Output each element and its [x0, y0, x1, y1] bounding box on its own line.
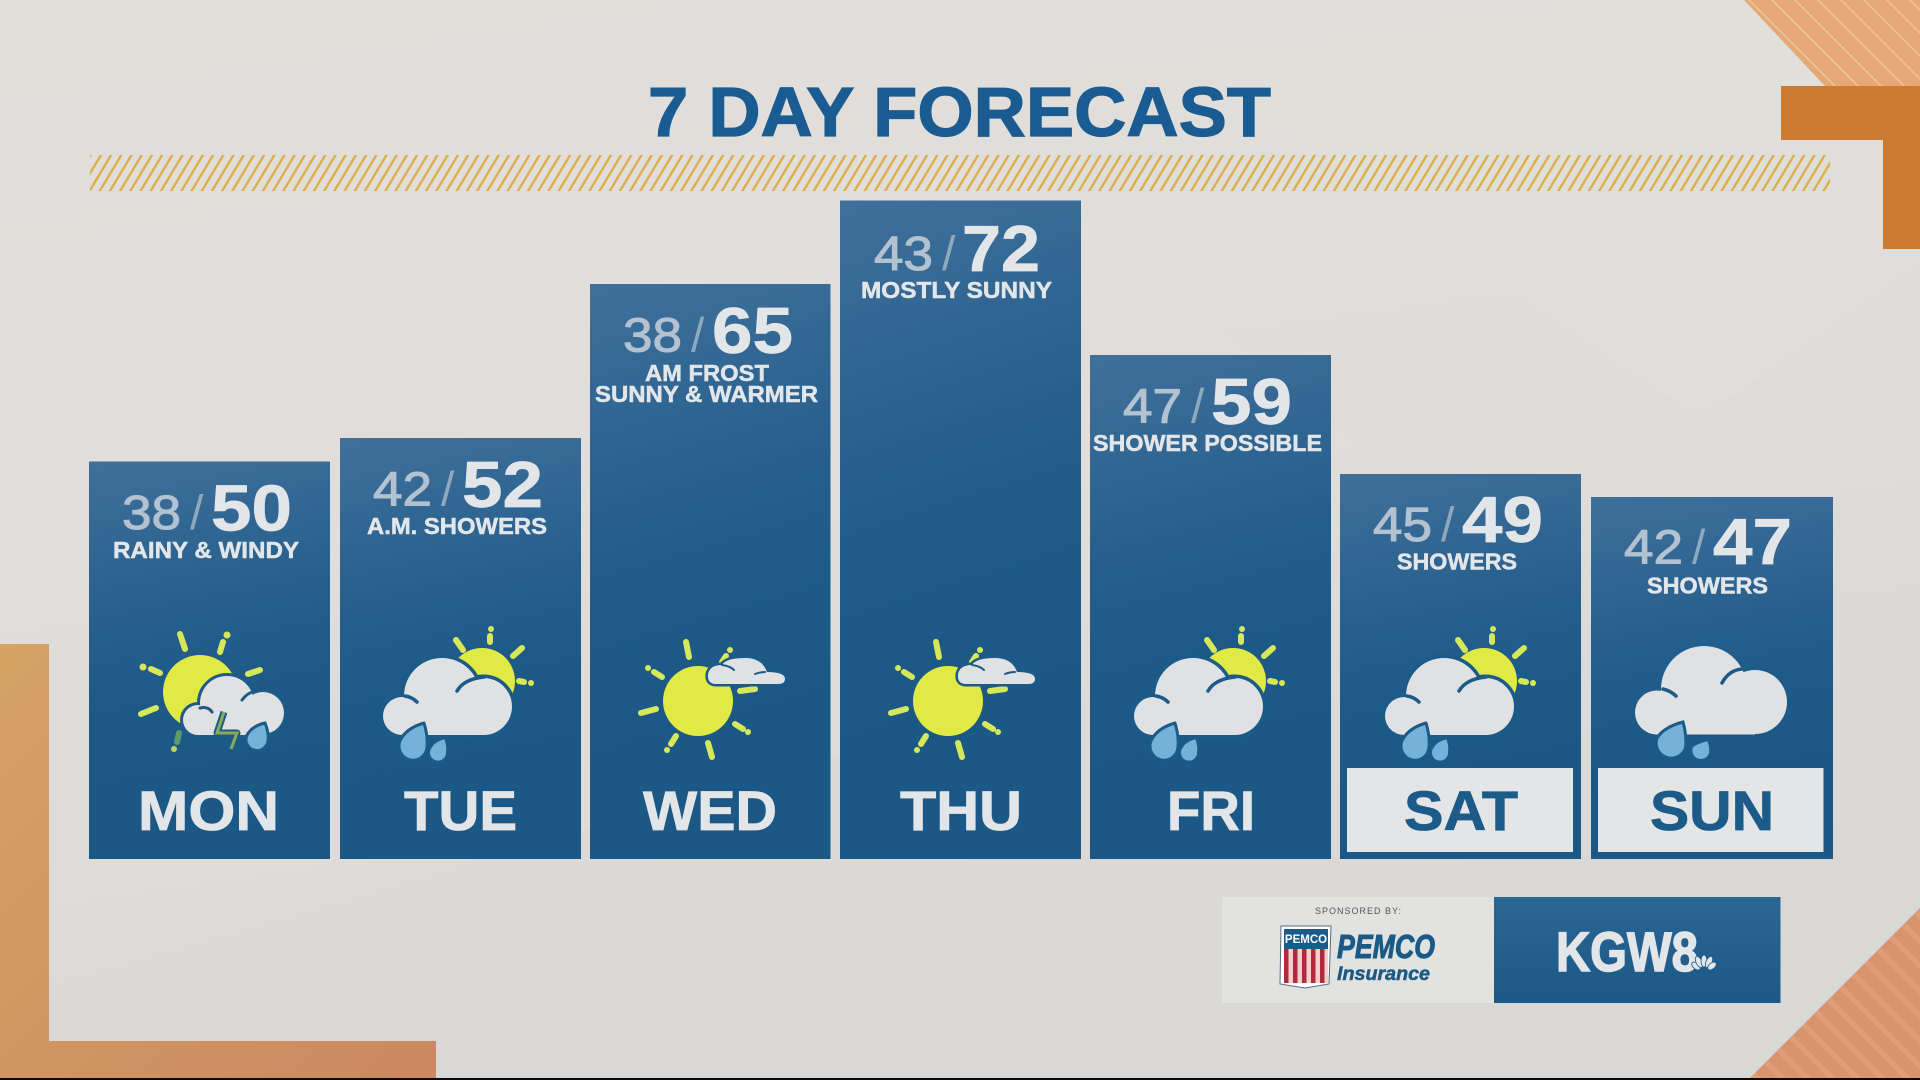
logo: PEMCO wordmark: PEMCO — [1337, 928, 1435, 965]
temperatures: Monday: / — [190, 487, 204, 540]
temperatures: Saturday: 49 — [1462, 483, 1543, 556]
panel: Thursday — [840, 200, 1081, 859]
logo: KGW8: KGW8 — [1556, 920, 1698, 983]
icon: cloud, sun and rain — [1385, 626, 1536, 762]
icon: cloud, sun and rain — [1134, 626, 1285, 762]
condition: Friday: SHOWER POSSIBLE — [1093, 430, 1322, 456]
temperatures: Thursday: 43 — [874, 228, 933, 281]
condition: Saturday: SHOWERS — [1397, 548, 1517, 574]
temperatures: Monday: 38 — [122, 487, 181, 540]
temperatures: Wednesday: / — [691, 310, 705, 362]
temperatures: Tuesday: 52 — [462, 448, 543, 521]
icon: sun with small cloud — [641, 642, 785, 757]
icon: sun with small cloud — [891, 642, 1035, 757]
temperatures: Sunday: 42 — [1624, 522, 1683, 574]
temperatures: Friday: 59 — [1211, 365, 1292, 438]
condition: Wednesday: SUNNY & WARMER — [595, 381, 818, 407]
condition: Thursday: MOSTLY SUNNY — [861, 277, 1052, 303]
temperatures: Saturday — [1373, 483, 1543, 556]
day label: Thursday: THU — [900, 779, 1022, 842]
temperatures: Tuesday — [373, 448, 543, 521]
corner accent: bottom left bracket — [0, 644, 436, 1078]
logo: PEMCO shield — [1280, 926, 1331, 988]
temperatures: Thursday: 72 — [962, 212, 1040, 285]
temperatures: Wednesday: 65 — [712, 294, 793, 367]
day label: Wednesday: WED — [643, 779, 777, 842]
logo: peacock — [1690, 955, 1718, 972]
icon: rain cloud — [1635, 646, 1787, 760]
temperatures: Sunday: / — [1692, 522, 1706, 574]
title: 7 DAY FORECAST — [648, 73, 1271, 151]
temperatures: Tuesday: / — [441, 464, 455, 516]
temperatures: Sunday: 47 — [1713, 505, 1792, 578]
panel: Tuesday — [340, 438, 581, 859]
hatched divider — [90, 155, 1830, 191]
condition: Monday: RAINY & WINDY — [113, 537, 299, 563]
weekend day tag: Saturday: SAT — [1404, 779, 1518, 842]
condition: Tuesday: A.M. SHOWERS — [367, 513, 547, 539]
temperatures: Wednesday: 38 — [623, 310, 682, 362]
corner accent: bottom right striped triangle — [1750, 908, 1920, 1078]
day label: Friday: FRI — [1167, 779, 1255, 842]
station box — [1494, 897, 1780, 1003]
temperatures: Tuesday: 42 — [373, 464, 432, 516]
temperatures: Monday — [122, 472, 292, 544]
temperatures: Friday — [1123, 365, 1292, 438]
temperatures: Friday: / — [1191, 380, 1205, 434]
panel: Monday — [89, 462, 330, 859]
panel: Wednesday — [590, 284, 830, 859]
corner accent: top right striped block — [1740, 0, 1920, 86]
temperatures: Wednesday — [623, 294, 793, 367]
panel: Sunday — [1591, 497, 1833, 859]
icon: cloud, sun and rain — [383, 626, 534, 762]
temperatures: Saturday: 45 — [1373, 499, 1432, 552]
weekend day tag: Sunday — [1598, 768, 1824, 852]
panel: Saturday — [1340, 474, 1581, 859]
day label: Monday: MON — [138, 779, 279, 842]
logo: PEMCO wordmark: Insurance — [1337, 964, 1430, 985]
sponsor box — [1222, 897, 1494, 1003]
temperatures: Thursday — [874, 212, 1040, 285]
corner accent: top right orange bracket — [1781, 86, 1920, 249]
condition: Wednesday: AM FROST — [645, 360, 769, 386]
panel: Friday — [1090, 355, 1331, 859]
temperatures: Monday: 50 — [211, 472, 292, 544]
icon: sun with storm cloud — [140, 632, 284, 752]
bottom black strip — [0, 1078, 1920, 1080]
temperatures: Thursday: / — [942, 228, 956, 281]
temperatures: Sunday — [1624, 505, 1792, 578]
temperatures: Friday: 47 — [1123, 380, 1182, 434]
logo: PEMCO wordmark — [1337, 928, 1435, 985]
condition: Wednesday — [595, 360, 818, 407]
temperatures: Saturday: / — [1441, 499, 1455, 552]
weekend day tag: Sunday: SUN — [1650, 779, 1774, 842]
condition: Sunday: SHOWERS — [1647, 572, 1768, 598]
sponsored by label: SPONSORED BY: — [1315, 906, 1401, 916]
weekend day tag: Saturday — [1347, 768, 1573, 852]
day label: Tuesday: TUE — [404, 779, 517, 842]
logo: PEMCO shield: PEMCO — [1285, 934, 1327, 946]
